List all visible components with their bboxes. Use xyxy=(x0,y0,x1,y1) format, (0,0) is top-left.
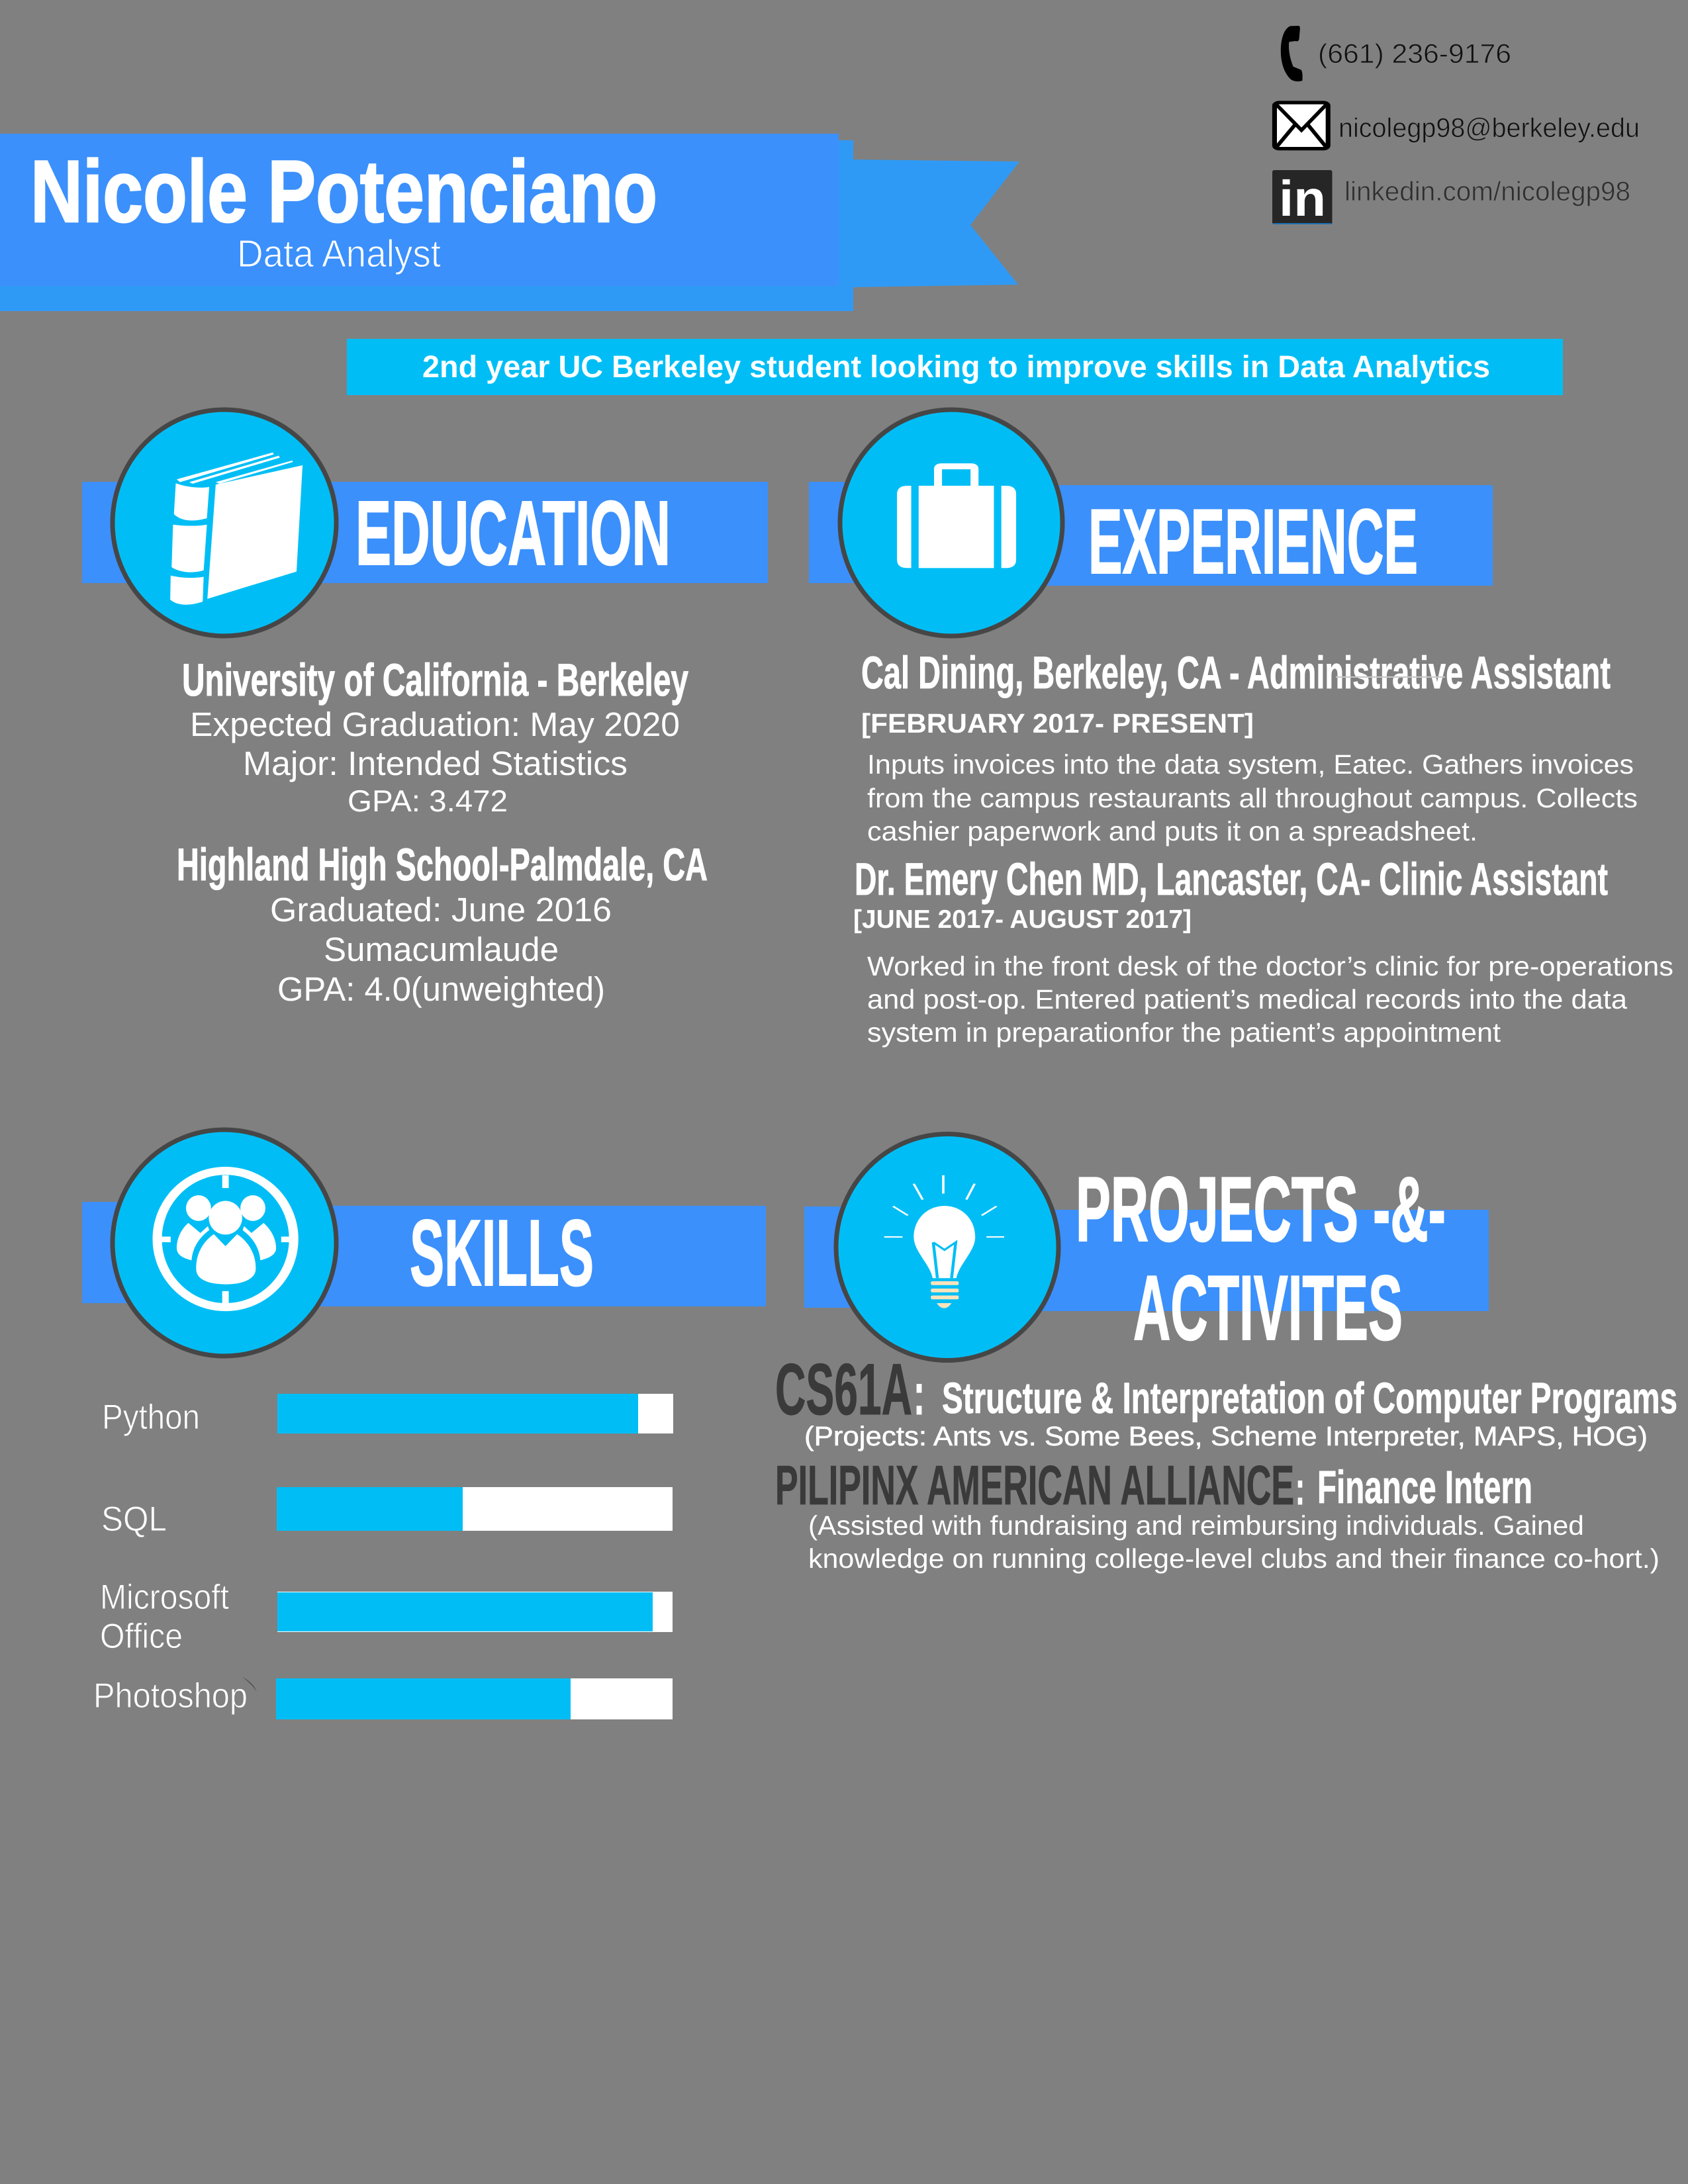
icon: envelope xyxy=(1274,103,1328,149)
panel: projects and activities xyxy=(775,1134,1677,1574)
ribbon tail xyxy=(851,159,1019,287)
skill: photoshop: Photoshop xyxy=(93,1676,248,1715)
skill: sql xyxy=(101,1487,673,1539)
contact details xyxy=(1272,26,1640,227)
job: cal dining: from the campus restaurants all throughout campus. Collects xyxy=(867,783,1638,813)
panel: skills xyxy=(82,1130,766,1719)
activity: pilipinx american alliance: PILIPINX AMERICAN ALLIANCE xyxy=(775,1454,1294,1516)
skill: photoshop xyxy=(93,1676,673,1719)
linkedin url: linkedin.com/nicolegp98 xyxy=(1344,176,1630,206)
high school block: Highland High School-Palmdale, CA xyxy=(177,839,708,890)
university block: GPA: 3.472 xyxy=(348,784,508,818)
email address: nicolegp98@berkeley.edu xyxy=(1338,113,1640,143)
skill bar chart xyxy=(93,1394,673,1719)
university block: Major: Intended Statistics xyxy=(243,745,628,782)
icon: light bulb xyxy=(836,1134,1058,1361)
university block: Expected Graduation: May 2020 xyxy=(190,705,680,743)
job: clinic: system in preparationfor the patient’s appointment xyxy=(867,1017,1501,1048)
high school block: Graduated: June 2016 xyxy=(270,891,612,929)
panel: education xyxy=(82,410,768,1008)
project: cs61a: (Projects: Ants vs. Some Bees, Scheme Interpreter, MAPS, HOG) xyxy=(804,1421,1648,1451)
activity: pilipinx american alliance: Finance Intern xyxy=(1317,1461,1532,1513)
job: cal dining: [FEBRUARY 2017- PRESENT] xyxy=(861,708,1254,739)
ribbon front xyxy=(0,134,839,286)
university block xyxy=(182,655,688,818)
skill: microsoft office: Microsoft xyxy=(100,1578,229,1617)
icon: briefcase xyxy=(840,410,1062,636)
skill: sql: SQL xyxy=(101,1500,167,1539)
icon: linkedin: in xyxy=(1279,171,1326,227)
job: cal dining: Inputs invoices into the data system, Eatec. Gathers invoices xyxy=(867,749,1634,780)
job: cal dining: cashier paperwork and puts it on a spreadsheet. xyxy=(867,816,1477,846)
header ribbon with name xyxy=(0,134,1019,311)
icon: phone xyxy=(1281,26,1303,81)
job: clinic: [JUNE 2017- AUGUST 2017] xyxy=(853,905,1192,934)
skill: python: Python xyxy=(102,1398,200,1437)
heading bar xyxy=(82,482,768,583)
activity: pilipinx american alliance xyxy=(775,1454,1660,1574)
high school block: GPA: 4.0(unweighted) xyxy=(277,970,605,1008)
heading: EXPERIENCE xyxy=(1088,490,1418,593)
activity: pilipinx american alliance: knowledge on running college-level clubs and their finance co-hort.) xyxy=(808,1543,1660,1574)
heading: ACTIVITES xyxy=(1133,1257,1403,1359)
job: clinic: and post-op. Entered patient’s medical records into the data xyxy=(867,984,1627,1015)
activity: pilipinx american alliance: (Assisted with fundraising and reimbursing individuals. Gained xyxy=(808,1510,1584,1541)
university block: University of California - Berkeley xyxy=(182,655,688,705)
job: clinic xyxy=(853,854,1673,1048)
heading: SKILLS xyxy=(410,1201,594,1306)
project: cs61a: CS61A xyxy=(775,1349,912,1430)
tagline banner xyxy=(347,339,1563,395)
project: cs61a xyxy=(775,1349,1677,1451)
ribbon back band xyxy=(0,140,853,311)
job: clinic: Worked in the front desk of the doctor’s clinic for pre-operations xyxy=(867,951,1673,981)
job title: Data Analyst xyxy=(237,232,441,275)
job: cal dining xyxy=(861,647,1638,846)
heading bar xyxy=(809,482,1493,586)
activity: pilipinx american alliance: : xyxy=(1295,1463,1305,1514)
high school block xyxy=(177,839,708,1008)
project: cs61a: : xyxy=(914,1361,925,1428)
tagline banner: 2nd year UC Berkeley student looking to improve skills in Data Analytics xyxy=(422,349,1490,384)
phone number: (661) 236-9176 xyxy=(1318,38,1511,69)
skill: microsoft office xyxy=(100,1578,673,1656)
panel: experience xyxy=(809,410,1673,1048)
name heading: Nicole Potenciano xyxy=(30,143,657,241)
icon: team target xyxy=(113,1130,336,1356)
icon: book xyxy=(113,410,336,636)
skill: python xyxy=(102,1394,673,1437)
heading: EDUCATION xyxy=(355,482,671,584)
skill: microsoft office: Office xyxy=(100,1617,183,1656)
high school block: Sumacumlaude xyxy=(324,931,559,968)
heading bar xyxy=(804,1206,1489,1311)
heading xyxy=(1076,1158,1446,1359)
heading bar xyxy=(82,1202,766,1306)
